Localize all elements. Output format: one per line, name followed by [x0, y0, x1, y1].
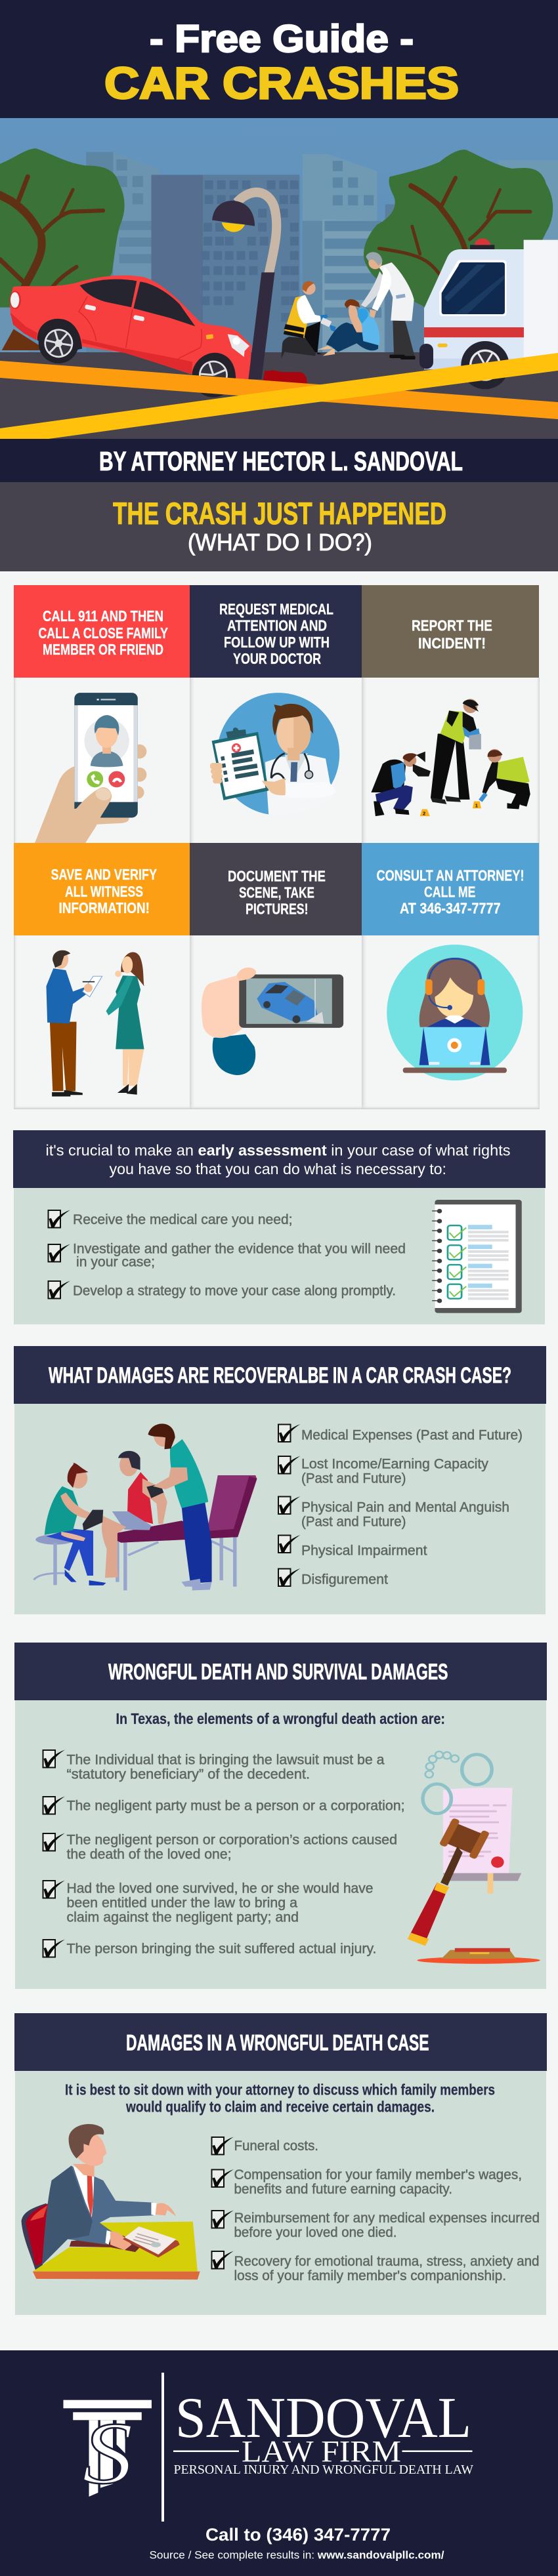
checklist item: [278, 1568, 388, 1587]
checklist item: The negligent person or corporation’s actions caused: [67, 1833, 397, 1847]
checklist item: Receive the medical care you need;: [73, 1212, 292, 1227]
panel header: [14, 2013, 547, 2071]
caution tapes: [0, 353, 558, 440]
step 3 header: report the incident: [362, 585, 539, 678]
panel header: you have so that you can do what is necessary to:: [109, 1160, 446, 1177]
step 2 header: request medical attention: YOUR DOCTOR: [233, 650, 321, 667]
call to action: Call to (346) 347-7777: [205, 2525, 391, 2545]
checklist item: before your loved one died.: [234, 2225, 397, 2240]
checklist item: Funeral costs.: [234, 2138, 318, 2154]
checklist item: [43, 1833, 397, 1862]
checklist item: been entitled under the law to bring a: [67, 1896, 297, 1910]
step 6 header: consult an attorney: [362, 843, 539, 935]
checklist item: [43, 1880, 373, 1925]
paramedic: [281, 281, 336, 359]
panel body: [15, 2071, 546, 2315]
checklist item: Compensation for your family member's wages,: [234, 2167, 522, 2182]
checklist item: Recovery for emotional trauma, stress, anxiety and: [234, 2254, 540, 2269]
step 1 header: call 911: CALL 911 AND THEN: [43, 607, 163, 624]
road: [0, 352, 558, 440]
step 1 header: call 911: CALL A CLOSE FAMILY: [38, 624, 168, 642]
buildings: [0, 152, 558, 354]
section heading: the crash just happened: [0, 482, 558, 571]
icon: notebook checklist: [432, 1200, 522, 1313]
title: free guide: - Free Guide -: [150, 18, 414, 60]
step 5 header: document the scene: SCENE, TAKE: [239, 884, 314, 901]
icon: police investigating scene: 1: [475, 803, 478, 809]
icon: hand holding phone: [35, 693, 146, 843]
checklist item: Develop a strategy to move your case along promptly.: [73, 1283, 396, 1299]
photographer: [371, 752, 431, 816]
step 3 header: report the incident: REPORT THE: [412, 617, 492, 634]
doctor in white coat: [361, 252, 416, 359]
step 4 header: save witness information: ALL WITNESS: [65, 883, 143, 900]
panel: damages in a wrongful death case: [14, 2013, 547, 2315]
checklist item: benefits and future earning capacity.: [234, 2182, 452, 2197]
logo mark: pillar with S: [63, 2400, 152, 2503]
street lamp: [212, 192, 276, 274]
checklist item: Physical Impairment: [301, 1543, 427, 1559]
red car: [2, 276, 251, 398]
checklist item: (Past and Future): [301, 1514, 406, 1530]
step 3 header: report the incident: INCIDENT!: [418, 635, 486, 652]
icon: phone photographing crashed car: [202, 968, 343, 1075]
panel body: [15, 1700, 546, 1989]
checklist item: the death of the loved one;: [67, 1847, 231, 1862]
panel header: [13, 1130, 546, 1188]
panel: early assessment: [13, 1130, 546, 1324]
step 6 header: consult an attorney: AT 346-347-7777: [400, 900, 500, 917]
checklist item: loss of your family member's companionship.: [234, 2268, 506, 2283]
wordmark: PERSONAL INJURY AND WRONGFUL DEATH LAW: [173, 2463, 473, 2477]
checklist item: [49, 1241, 406, 1270]
step 4 header: save witness information: SAVE AND VERIFY: [51, 866, 157, 883]
checklist item: [211, 2167, 522, 2197]
step 2 header: request medical attention: ATTENTION AND: [227, 617, 327, 634]
intro text: would qualify to claim and receive certain damages.: [125, 2098, 435, 2115]
title: car crashes: CAR CRASHES: [104, 58, 459, 108]
logo mark: pillar with S: S: [82, 2405, 133, 2503]
checklist item: Disfigurement: [301, 1572, 388, 1587]
step 5 header: document the scene: [190, 843, 362, 935]
icon: police investigating scene: [371, 699, 530, 817]
subheading: in texas: In Texas, the elements of a wrongful death action are:: [116, 1710, 445, 1727]
panel header: [14, 1346, 546, 1404]
icon: man taking notes from woman: [46, 951, 144, 1096]
checklist item: (Past and Future): [301, 1471, 406, 1486]
lamp pole: [248, 272, 275, 379]
wordmark: SANDOVAL: [175, 2386, 471, 2450]
checklist item: [278, 1496, 509, 1530]
standing officer: [431, 699, 481, 804]
wordmark: [173, 2386, 473, 2477]
checklist item: Reimbursement for any medical expenses incurred: [234, 2211, 540, 2226]
panel body: [14, 1188, 545, 1324]
checklist item: The negligent party must be a person or a corporation;: [67, 1799, 404, 1813]
illustration: attorney at desk: [22, 2124, 200, 2280]
source line: Source / See complete results in: www.sandovalpllc.com/: [150, 2549, 444, 2561]
checklist item: [43, 1750, 385, 1782]
step 5 header: document the scene: PICTURES!: [246, 900, 309, 917]
illustration: physical therapy: [33, 1423, 257, 1590]
panel body: [14, 1404, 546, 1614]
icon: doctor with clipboard: [210, 693, 339, 815]
checklist item: “statutory beneficiary” of the decedent.: [67, 1767, 310, 1782]
section heading: the crash just happened: THE CRASH JUST HAPPENED: [113, 496, 446, 531]
panel header: [14, 1643, 547, 1700]
panel: wrongful death and survival damages: [14, 1643, 547, 1989]
checklist item: The person bringing the suit suffered actual injury.: [67, 1942, 377, 1956]
title header: [0, 0, 558, 119]
step 4 header: save witness information: [14, 843, 190, 935]
checklist item: The Individual that is bringing the lawsuit must be a: [67, 1753, 385, 1767]
subheading: (WHAT DO I DO?): [188, 529, 372, 556]
icon: police investigating scene: 2: [423, 811, 425, 817]
step 1 header: call 911: MEMBER OR FRIEND: [43, 641, 163, 658]
checklist item: [278, 1535, 427, 1559]
checklist item: Medical Expenses (Past and Future): [301, 1427, 523, 1443]
illustration: gavel, handcuffs and document: [408, 1751, 540, 1964]
seated injured man: [317, 299, 379, 356]
step 2 header: request medical attention: [190, 585, 362, 678]
icon: call centre attorney: [387, 945, 523, 1080]
ambulance: [419, 238, 558, 389]
checklist item: in your case;: [76, 1254, 155, 1270]
step 4 header: save witness information: INFORMATION!: [59, 899, 150, 916]
footer: [0, 2350, 558, 2576]
checklist item: claim against the negligent party; and: [67, 1910, 299, 1925]
checklist item: Lost Income/Earning Capacity: [301, 1456, 488, 1472]
step 2 header: request medical attention: REQUEST MEDICAL: [219, 601, 333, 618]
checklist item: [211, 2251, 540, 2283]
injured person with paramedic and doctor: [263, 252, 416, 384]
step 2 header: request medical attention: FOLLOW UP WITH: [224, 634, 330, 651]
six-step grid panel: [14, 585, 540, 1109]
step 5 header: document the scene: DOCUMENT THE: [228, 867, 326, 884]
intro text: [65, 2081, 495, 2115]
wordmark: LAW FIRM: [242, 2435, 401, 2469]
panel header: it's crucial to make an early assessment in your case of what rights: [46, 1141, 511, 1158]
checklist item: Physical Pain and Mental Anguish: [301, 1500, 509, 1515]
crouching officer: [479, 749, 530, 809]
step 1 header: call 911: [14, 585, 190, 678]
step 6 header: consult an attorney: CALL ME: [424, 883, 475, 900]
checklist item: Had the loved one survived, he or she would have: [67, 1881, 373, 1896]
author bar: [0, 439, 558, 483]
checklist item: [278, 1456, 488, 1486]
vertical divider: [161, 2373, 164, 2522]
checklist item: Investigate and gather the evidence that you will need: [73, 1241, 406, 1257]
crash scene illustration: [0, 118, 558, 440]
trees: [0, 148, 553, 308]
checklist item: [211, 2211, 540, 2240]
panel: recoverable damages: [14, 1346, 546, 1614]
checklist item: [211, 2137, 318, 2156]
